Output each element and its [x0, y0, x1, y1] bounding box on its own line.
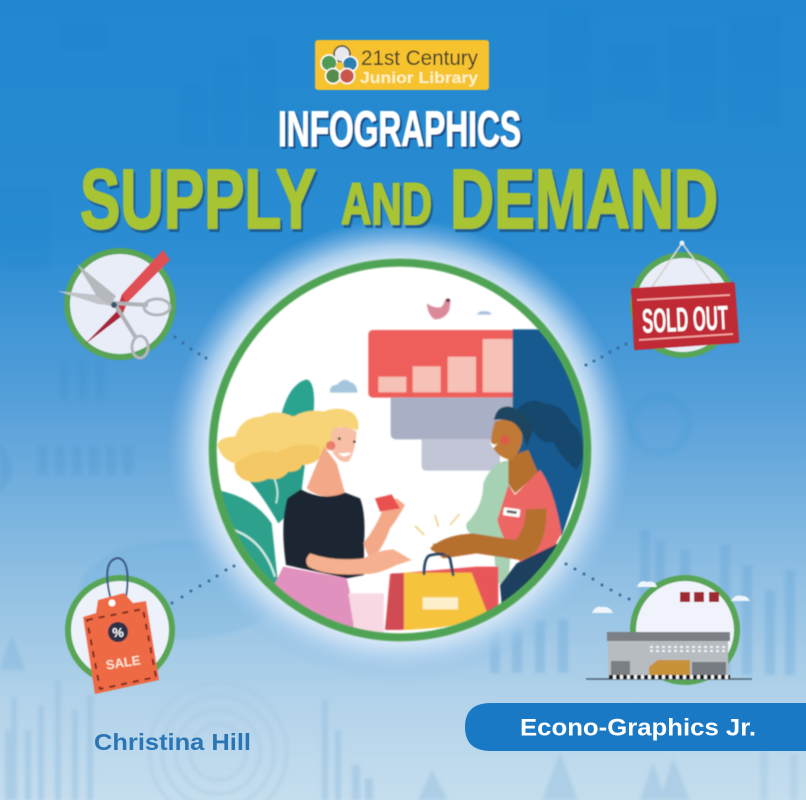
employee hair back	[517, 401, 583, 470]
icon: sale tag	[68, 558, 172, 694]
heading: SUPPLY AND DEMAND: SUPPLY	[82, 155, 318, 249]
publisher logo: Junior Library	[360, 70, 478, 87]
icon: bird	[427, 298, 451, 319]
small clouds	[637, 581, 657, 587]
icon: clover flower	[321, 46, 358, 84]
name tag	[503, 507, 520, 517]
store doorway	[513, 329, 590, 537]
face	[331, 427, 357, 462]
neck	[307, 447, 345, 497]
dark pants	[500, 543, 563, 603]
series title: Econo-Graphics Jr.	[520, 714, 756, 742]
white bag	[348, 593, 384, 633]
top	[283, 489, 364, 578]
store sign chart	[368, 330, 518, 398]
series banner	[465, 703, 806, 751]
plant	[217, 379, 314, 587]
icon: factory	[586, 578, 752, 682]
icon: cloud	[330, 380, 357, 393]
bottom left bars	[5, 680, 798, 800]
dotted connectors	[170, 336, 630, 604]
bottom triangles	[418, 753, 690, 800]
pencil	[84, 312, 122, 345]
heading: SUPPLY AND DEMAND: AND	[343, 175, 434, 240]
publisher logo	[315, 40, 489, 90]
logo text: 21st Century	[361, 47, 478, 70]
heading: SUPPLY AND DEMAND: SUPPLY	[80, 152, 316, 246]
concentric rings	[149, 683, 287, 800]
icon: credit card	[375, 494, 400, 512]
scissor blades	[57, 291, 114, 306]
employee	[430, 406, 563, 603]
heading: INFOGRAPHICS: INFOGRAPHICS	[278, 101, 521, 157]
heading: SUPPLY AND DEMAND	[80, 152, 720, 249]
right bars	[490, 530, 795, 675]
icon: sold out sign	[631, 240, 739, 355]
icon: scissors and pencil	[57, 250, 173, 358]
tag text: SALE	[105, 652, 142, 673]
green person	[466, 461, 513, 583]
blonde customer	[217, 409, 412, 633]
green ring	[213, 263, 587, 637]
face	[491, 420, 522, 460]
shopping bags	[385, 514, 498, 630]
heading: INFOGRAPHICS: INFOGRAPHICS	[280, 103, 523, 159]
hair	[494, 406, 533, 447]
hair	[217, 409, 358, 482]
heading: INFOGRAPHICS	[278, 101, 523, 159]
arm with open hand	[306, 549, 412, 575]
heading: SUPPLY AND DEMAND: AND	[341, 172, 432, 237]
sign shadows	[391, 398, 517, 471]
skirt	[274, 567, 354, 633]
icon: small cloud	[477, 311, 492, 315]
main circle glow	[167, 218, 631, 682]
red top	[497, 470, 562, 562]
tag percent: %	[112, 625, 124, 640]
forearm up	[363, 498, 405, 560]
logo badge	[315, 40, 489, 90]
author name: Christina Hill	[94, 729, 251, 755]
panel: central shopping illustration	[209, 259, 591, 641]
arm	[430, 508, 547, 560]
neck and face	[508, 450, 538, 493]
